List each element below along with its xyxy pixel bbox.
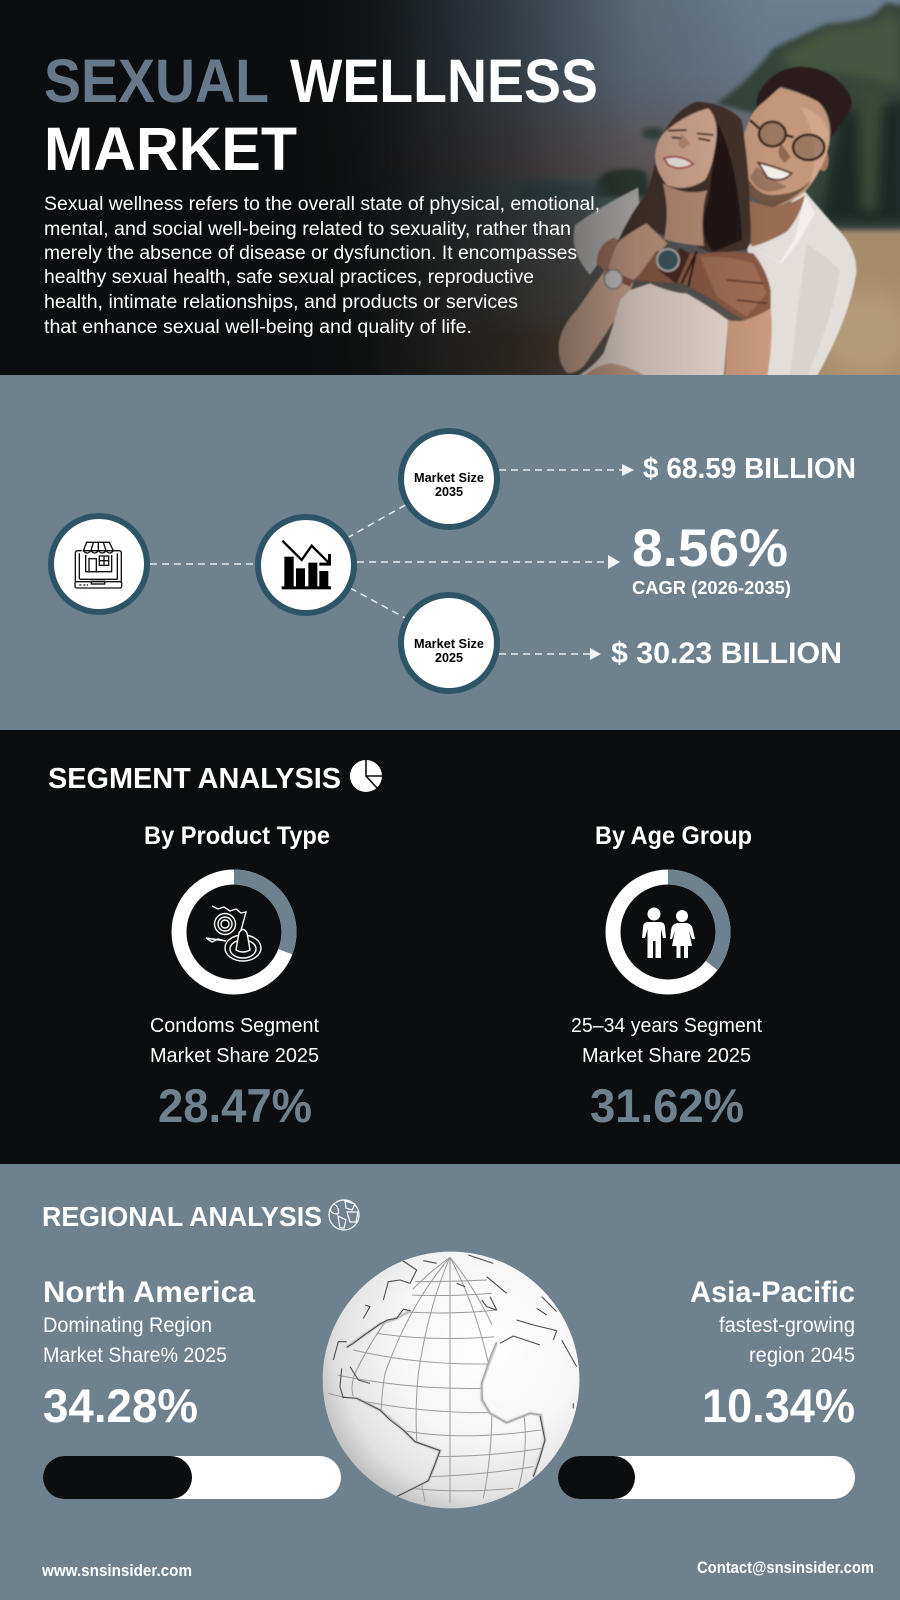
heading: regional analysis: REGIONAL ANALYSIS [42, 1201, 322, 1232]
region: north america: 34.28% [43, 1379, 198, 1432]
region: north america [43, 1276, 255, 1432]
trees [717, 3, 900, 227]
woman's arm [558, 270, 633, 373]
man's neck [748, 195, 805, 247]
woman's hand [608, 223, 667, 281]
heading: segment analysis: SEGMENT ANALYSIS [48, 763, 341, 795]
column: by age group: 25–34 years Segment [571, 1015, 762, 1037]
panel: segment analysis [0, 730, 900, 1164]
woman's face [655, 108, 717, 188]
sand [816, 228, 900, 375]
woman's lower arm [725, 308, 772, 377]
region: north america: Market Share% 2025 [43, 1344, 227, 1367]
column: by product type: By Product Type [144, 822, 330, 850]
man's glasses [750, 120, 824, 160]
woman's mouth [664, 157, 693, 168]
column: by age group: By Age Group [595, 822, 752, 850]
man's forearm and hand [635, 251, 771, 320]
woman's hair [617, 102, 751, 254]
region: asia-pacific: fastest-growing [719, 1314, 855, 1337]
node: market size 2025: Market Size [414, 636, 484, 651]
column: by product type: Market Share 2025 [150, 1045, 319, 1067]
column: by age group: 31.62% [590, 1079, 744, 1132]
column: by product type [144, 822, 330, 1132]
node: market size 2035: Market Size [414, 470, 484, 485]
title: MARKET [44, 115, 297, 183]
region: asia-pacific: 10.34% [702, 1379, 855, 1432]
node: chart icon [258, 517, 354, 613]
node: store icon [51, 516, 147, 612]
donut: condoms share [179, 877, 289, 987]
icon: online store [75, 542, 122, 588]
value: 68.59 billion: $ 68.59 BILLION [643, 453, 856, 485]
column: by age group [571, 822, 762, 1132]
panel: market size [0, 375, 900, 730]
title [44, 47, 598, 183]
description text: healthy sexual health, safe sexual practices, reproductive [44, 267, 534, 288]
man's watch [658, 248, 690, 284]
column: by product type: 28.47% [158, 1079, 312, 1132]
panel: header [0, 0, 900, 380]
icon: globe outline [329, 1200, 359, 1230]
man's ear [818, 149, 829, 171]
arrow: to 30.23 billion [590, 648, 601, 660]
icon: declining bar chart [282, 541, 331, 589]
globe [317, 1252, 587, 1508]
node: market size 2025 [401, 595, 497, 691]
woman's top [577, 283, 728, 377]
panel: regional analysis [0, 1164, 900, 1600]
description text [44, 194, 600, 338]
donut: 25-34 years share [613, 877, 723, 987]
region: asia-pacific: Asia-Pacific [690, 1276, 855, 1309]
description text: health, intimate relationships, and products or services [44, 292, 518, 313]
icon: pie chart [350, 760, 382, 792]
region: north america: North America [43, 1276, 255, 1309]
region: asia-pacific [690, 1276, 855, 1432]
footer: contact: Contact@snsinsider.com [697, 1559, 874, 1577]
column: by product type: Condoms Segment [150, 1015, 319, 1037]
value: CAGR: 8.56% [632, 519, 788, 578]
description text: that enhance sexual well-being and quality of life. [44, 317, 472, 338]
land masses [317, 1253, 587, 1497]
description text: mental, and social well-being related to sexuality, rather than [44, 219, 571, 240]
icon: condom [206, 906, 261, 961]
man's mouth [758, 163, 792, 180]
node: market size 2035: 2035 [435, 484, 463, 499]
arrow: to 68.59 billion [622, 464, 634, 476]
description text: merely the absence of disease or dysfunction. It encompasses [44, 243, 577, 264]
woman's watch [603, 268, 633, 287]
man's face [740, 87, 830, 207]
woman's neck [663, 183, 707, 246]
footer: website: www.snsinsider.com [41, 1562, 192, 1580]
title: WELLNESS [290, 47, 598, 115]
node: market size 2025: 2025 [435, 650, 463, 665]
dark fade over the photo's left side [300, 0, 770, 376]
node: market size 2035 [401, 431, 497, 527]
progress bar: north america [43, 1456, 341, 1499]
value: CAGR: CAGR (2026-2035) [632, 578, 791, 598]
coastlines [347, 1311, 545, 1497]
man's arm arch [597, 237, 635, 281]
title: SEXUAL [44, 47, 269, 115]
man's hair [757, 67, 851, 138]
couple, softened [558, 67, 856, 377]
man's shirt [747, 189, 856, 377]
region: north america: Dominating Region [43, 1314, 212, 1337]
description text: Sexual wellness refers to the overall state of physical, emotional, [44, 194, 600, 215]
man's sleeve behind [573, 187, 640, 275]
region: asia-pacific: region 2045 [749, 1344, 855, 1367]
value: 30.23 billion: $ 30.23 BILLION [611, 637, 842, 670]
progress bar: asia-pacific [558, 1456, 855, 1499]
icon: man and woman [642, 908, 695, 958]
arrow: to 8.56% [608, 555, 620, 569]
column: by age group: Market Share 2025 [582, 1045, 751, 1067]
photo: laughing couple on a beach [300, 0, 900, 380]
